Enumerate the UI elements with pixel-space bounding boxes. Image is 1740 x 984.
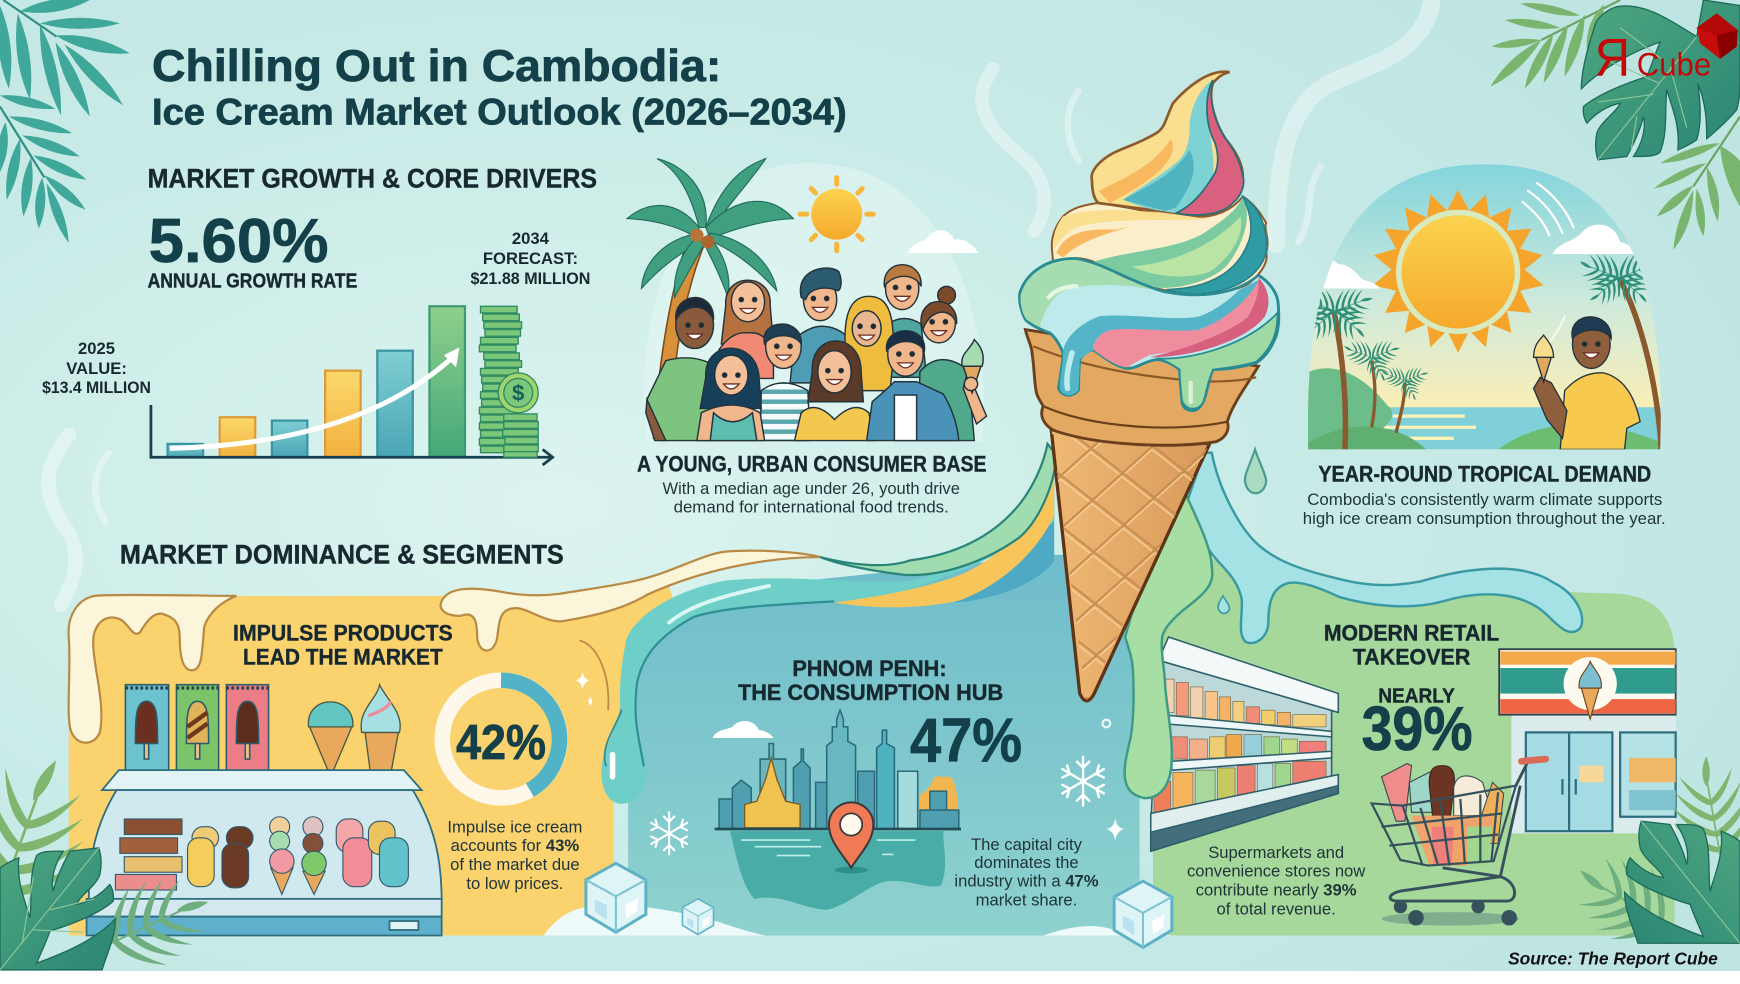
icon: scoop cone — [308, 702, 353, 777]
text: retail body — [1187, 843, 1366, 918]
icon: location pin — [829, 802, 873, 873]
dome backdrop — [644, 163, 984, 442]
icon: ice cream middle swirl — [1020, 196, 1268, 295]
icon: swirl cone — [361, 685, 400, 775]
heading: market growth: MARKET GROWTH & CORE DRIVERS — [148, 164, 597, 194]
text: Phnom Penh body: dominates the — [974, 853, 1079, 872]
icon: supermarket shelf — [1151, 637, 1338, 851]
icon: coin stack — [479, 306, 538, 457]
heading: impulse products: LEAD THE MARKET — [243, 645, 443, 670]
stat: growth rate: 5.60% — [149, 207, 328, 276]
text: Phnom Penh body: industry with a 47% — [954, 872, 1099, 891]
leaves: top-right — [1490, 0, 1740, 250]
stat: 47%: 47% — [910, 706, 1022, 775]
text: retail body: convenience stores now — [1187, 862, 1366, 881]
heading: young urban consumer base: A YOUNG, URBAN CONSUMER BASE — [637, 452, 987, 477]
text: impulse body — [447, 817, 582, 893]
icon: cloud — [908, 230, 979, 253]
text: young consumers body: demand for international food trends. — [674, 498, 949, 517]
snow mounds — [544, 904, 1176, 935]
melt stream: green ribbon — [820, 444, 1056, 575]
text: young consumers body: With a median age under 26, youth drive — [662, 479, 960, 498]
person: man light brown hair — [882, 265, 927, 377]
text: impulse body: accounts for 43% — [451, 836, 579, 855]
person: man dark hair — [790, 268, 850, 383]
label: 2025 value — [42, 339, 151, 397]
subtitle: Ice Cream Market Outlook (2026–2034) — [152, 91, 847, 132]
person: woman in hijab — [845, 296, 893, 391]
person: woman brown hair — [715, 280, 773, 378]
thin cream edge — [579, 640, 608, 710]
source note: Source: The Report Cube — [1508, 948, 1718, 968]
person: woman in teal top — [697, 348, 765, 441]
melt stream: blue underlayer — [954, 444, 1054, 603]
leaves: bottom-right — [1558, 749, 1740, 959]
icon: ice cube left — [586, 863, 646, 932]
icon: big sun — [1373, 190, 1544, 353]
melt stream: cream — [441, 551, 820, 651]
melt stream: light blue right — [1183, 453, 1582, 643]
stat: 39%: 39% — [1362, 695, 1473, 764]
ice cream cone — [1020, 72, 1279, 705]
person: man in blue shirt — [867, 331, 959, 441]
icon: palm tree — [627, 159, 793, 438]
sparkles on yellow panel — [576, 671, 593, 706]
text: impulse body: of the market due — [450, 855, 580, 874]
icon: ice cube right — [1114, 881, 1172, 947]
label: 2034 forecast: FORECAST: — [483, 249, 578, 268]
panel: modern retail background — [1153, 555, 1675, 935]
panel: tropical sun illustration — [1308, 164, 1661, 450]
icon: clouds — [1552, 225, 1638, 254]
icon: sparkle — [1106, 818, 1124, 841]
title: Chilling Out in Cambodia: — [152, 42, 721, 91]
panel: impulse products background — [69, 577, 710, 935]
label: 2034 forecast: 2034 — [512, 229, 550, 248]
person: man in green shirt — [646, 298, 716, 441]
text: young consumers body — [662, 479, 960, 517]
text: tropical demand body: Combodia's consistently warm climate supports — [1307, 490, 1662, 509]
text: retail body: contribute nearly 39% — [1196, 881, 1357, 900]
leaves: bottom-left — [0, 738, 225, 983]
label: 2025 value: $13.4 MILLION — [42, 378, 151, 397]
text: Phnom Penh body — [954, 835, 1099, 910]
leaves: top-left fronds — [0, 0, 130, 243]
icon: cone rim — [1025, 330, 1258, 445]
donut chart: 42% — [442, 680, 560, 798]
heading: modern retail: MODERN RETAIL — [1324, 620, 1499, 645]
logo: RCube: Cube — [1637, 46, 1711, 82]
heading: impulse products — [233, 620, 453, 670]
label: 2025 value: VALUE: — [66, 359, 127, 378]
icon: man with ice cream — [1534, 317, 1640, 449]
label: 2034 forecast: $21.88 MILLION — [471, 269, 590, 288]
icon: small ice cube — [682, 899, 714, 935]
icon: small bubble — [1102, 720, 1110, 727]
icon: ice cream top swirl — [1092, 72, 1244, 216]
heading: Phnom Penh — [738, 656, 1003, 705]
text: Phnom Penh body: The capital city — [971, 835, 1083, 854]
panel: Phnom Penh background — [628, 555, 1160, 935]
melt stream: teal inner edge and highlight — [605, 586, 833, 777]
melt stream: teal — [601, 488, 1054, 804]
group of young people — [646, 265, 987, 441]
droplet — [1245, 449, 1266, 493]
icon: sea and hills — [1308, 407, 1661, 450]
melt stream: yellow ribbon — [833, 466, 1054, 607]
heading: Phnom Penh: THE CONSUMPTION HUB — [738, 680, 1003, 705]
icon: store — [1499, 649, 1676, 833]
logo: RCube — [1595, 13, 1738, 87]
text: tropical demand body — [1303, 490, 1666, 528]
icon: shopping cart — [1372, 759, 1547, 925]
label: 2025 value: 2025 — [78, 339, 115, 358]
icon: held ice cream — [962, 340, 983, 393]
person: man in striped shirt — [760, 324, 810, 441]
label: 2034 forecast — [471, 229, 590, 288]
icon: snowflake right — [1062, 757, 1104, 806]
text: impulse body: to low prices. — [466, 874, 563, 893]
heading: Phnom Penh: PHNOM PENH: — [792, 656, 947, 681]
heat lines — [1522, 183, 1574, 355]
melt stream: green drip — [1125, 488, 1212, 798]
heading: impulse products: IMPULSE PRODUCTS — [233, 620, 453, 645]
stat: 42%: 42% — [456, 716, 546, 770]
icon: palm trees — [1314, 254, 1661, 450]
label: annual growth rate: ANNUAL GROWTH RATE — [148, 270, 357, 292]
icon: coin stack: $ — [512, 381, 525, 406]
icon: snowflake left — [651, 812, 687, 854]
icon: freezer display — [87, 770, 442, 935]
decorative cream drip left — [69, 595, 236, 743]
heading: modern retail — [1324, 620, 1499, 670]
person: woman with bun — [918, 286, 987, 441]
text: tropical demand body: high ice cream consumption throughout the year. — [1303, 509, 1666, 528]
heading: modern retail: TAKEOVER — [1353, 645, 1470, 670]
icon: ice cream bottom swirl — [1020, 259, 1279, 411]
person: woman in yellow top — [795, 341, 874, 441]
logo: RCube: Я — [1595, 28, 1630, 87]
icon: waffle cone — [1050, 429, 1212, 702]
steam wisps — [48, 3, 1432, 605]
small droplet — [1218, 596, 1230, 613]
heading: year-round tropical demand: YEAR-ROUND TROPICAL DEMAND — [1318, 462, 1651, 487]
text: Phnom Penh body: market share. — [976, 891, 1077, 910]
icon: sun — [800, 178, 873, 251]
icon: small cloud — [712, 721, 773, 738]
label: nearly: NEARLY — [1378, 685, 1455, 707]
text: retail body: Supermarkets and — [1208, 843, 1344, 862]
icon: ice cream wrappers — [125, 685, 269, 776]
text: impulse body: Impulse ice cream — [447, 817, 582, 836]
icon: city map — [715, 710, 961, 910]
heading: market dominance: MARKET DOMINANCE & SEGMENTS — [120, 540, 564, 570]
panel: young consumers illustration — [627, 159, 987, 442]
bar chart — [151, 306, 553, 465]
text: retail body: of total revenue. — [1217, 899, 1336, 918]
